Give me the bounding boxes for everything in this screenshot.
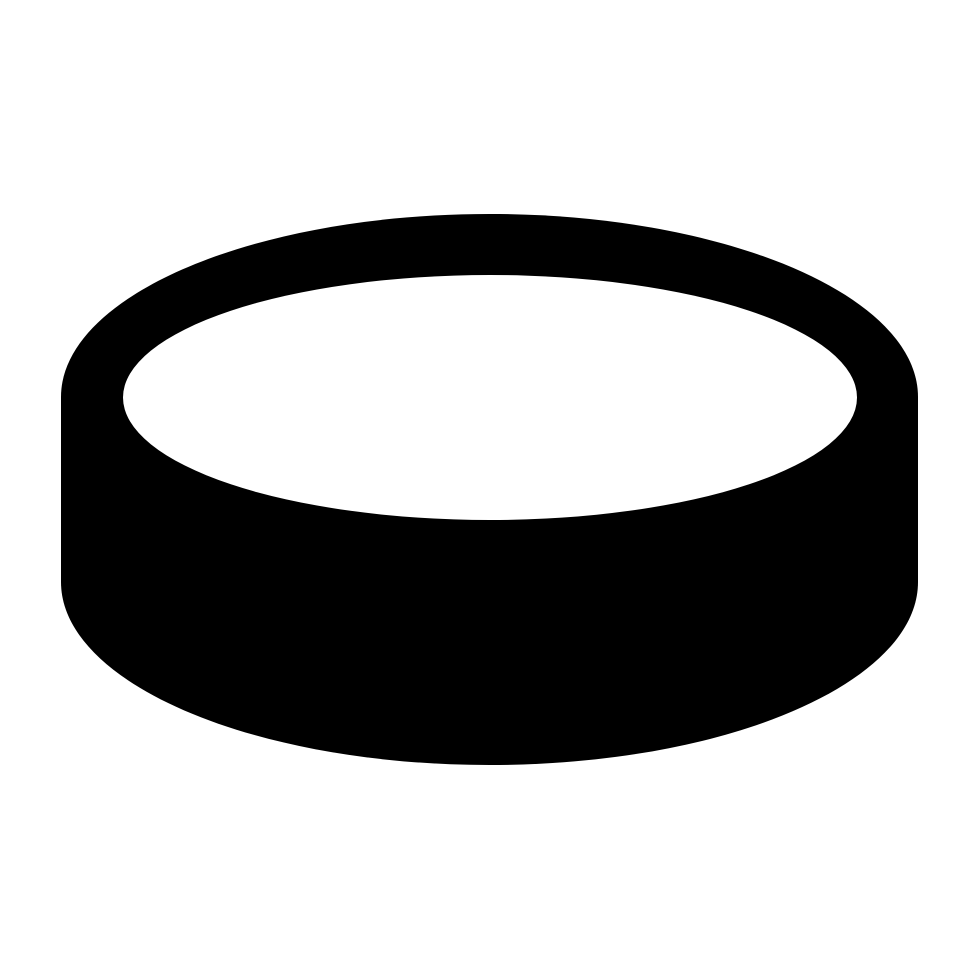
- icon: hockey puck: [61, 214, 918, 765]
- puck body: [61, 214, 918, 765]
- puck top face: [123, 275, 857, 520]
